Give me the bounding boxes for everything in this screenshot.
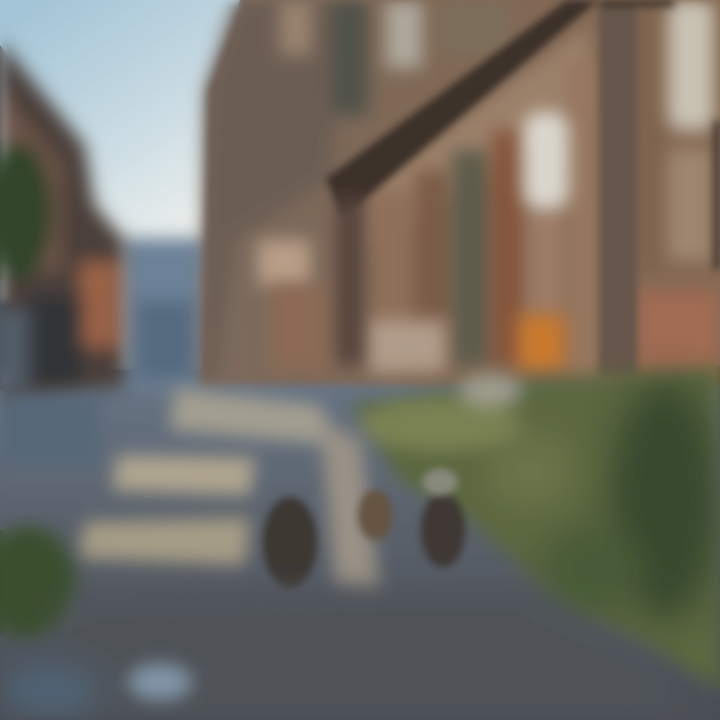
windows: bright panes — [523, 0, 714, 260]
lower facade arches — [370, 25, 590, 250]
light entry glow — [258, 240, 310, 286]
dark foreground pavement and puddle — [0, 590, 715, 720]
left building and tree — [0, 40, 125, 405]
large stone column — [598, 0, 720, 375]
light paving slabs — [0, 388, 380, 590]
sky — [0, 0, 300, 300]
upper facade shading — [200, 0, 350, 385]
dark diagonal beam — [325, 0, 600, 365]
seated animal figures — [262, 469, 466, 588]
ground: paved path — [0, 370, 720, 720]
green planted garden — [350, 365, 720, 690]
distant blue building — [122, 238, 207, 388]
orange door — [518, 315, 565, 370]
main brick building facade — [200, 0, 720, 385]
bush, lower left — [0, 526, 76, 638]
